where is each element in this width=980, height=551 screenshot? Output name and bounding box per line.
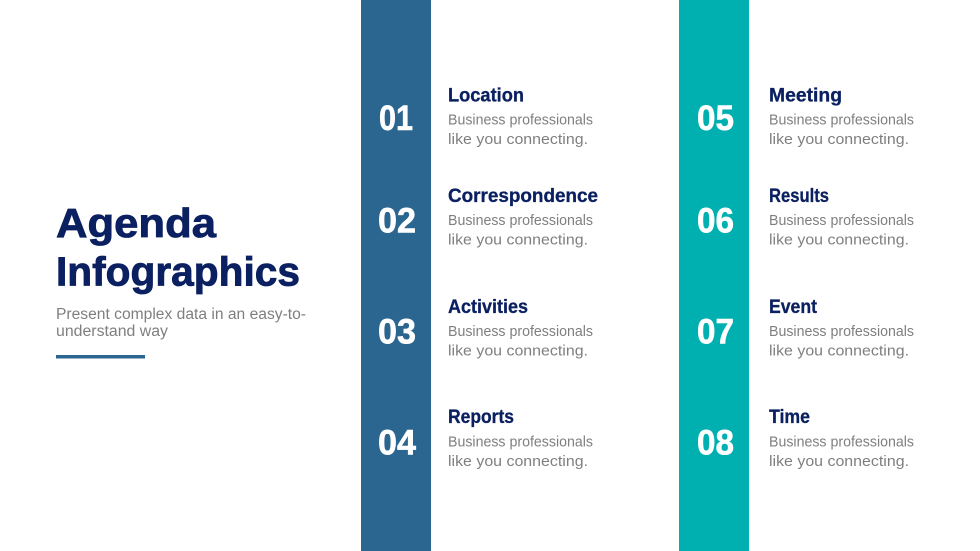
panel: blue column [361,0,431,551]
agenda item 08: Time [769,407,810,428]
agenda item 05: Meeting [769,86,842,106]
agenda item 05: Business professionals [769,112,914,128]
title block [56,200,306,358]
agenda item 02: Correspondence [448,186,598,207]
agenda item 04: like you connecting. [448,453,588,470]
agenda item 05 [697,86,914,148]
agenda item 03 [378,297,593,360]
agenda item 07: 07 [697,312,734,352]
agenda item 01: Business professionals [448,112,593,128]
agenda item 02 [378,186,598,248]
agenda item 07: Business professionals [769,323,914,340]
agenda item 01: like you connecting. [448,131,588,148]
agenda item 06: Business professionals [769,212,914,229]
agenda item 04: Business professionals [448,434,593,450]
agenda item 05: like you connecting. [769,131,909,148]
agenda item 01: 01 [379,99,413,138]
agenda item 06: Results [769,186,829,207]
subtitle: Present complex data in an easy-to- [56,306,306,323]
agenda item 02: like you connecting. [448,232,588,248]
agenda item 03: Activities [448,297,528,318]
agenda item 08: Business professionals [769,434,914,450]
agenda item 03: 03 [378,312,416,352]
subtitle [56,306,306,340]
agenda item 03: like you connecting. [448,342,588,360]
heading: Agenda [56,200,217,246]
heading [56,200,300,294]
accent underline [56,355,145,358]
agenda item 08 [697,407,914,470]
agenda item 07: Event [769,297,818,318]
agenda item 06: like you connecting. [769,232,909,248]
agenda item 02: Business professionals [448,212,593,229]
agenda item 01 [379,86,593,148]
heading: Infographics [56,248,300,294]
agenda item 04: 04 [378,424,417,462]
agenda item 06: 06 [697,202,734,240]
agenda item 04: Reports [448,407,514,428]
agenda item 07: like you connecting. [769,342,909,360]
agenda item 08: like you connecting. [769,453,909,470]
panel: teal column [679,0,749,551]
subtitle: understand way [56,323,168,340]
agenda item 07 [697,297,914,360]
agenda item 05: 05 [697,99,734,138]
agenda item 06 [697,186,914,248]
agenda item 08: 08 [697,424,734,462]
agenda item 02: 02 [378,202,416,240]
agenda item 04 [378,407,593,470]
agenda item 01: Location [448,86,524,106]
agenda item 03: Business professionals [448,323,593,340]
